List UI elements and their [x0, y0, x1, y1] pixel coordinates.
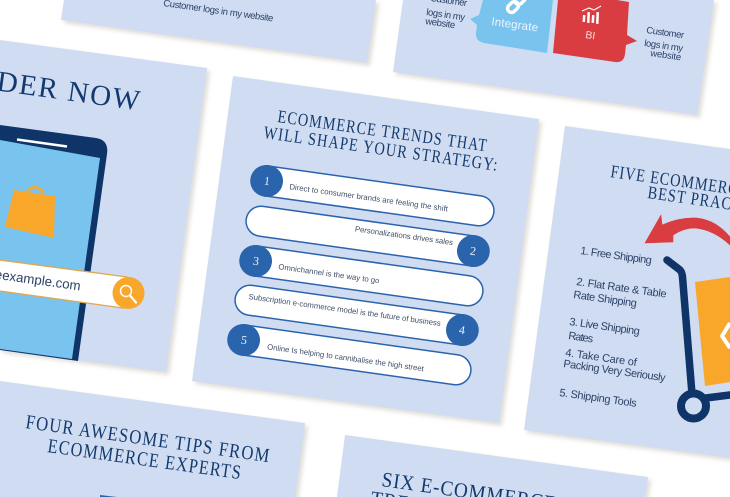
trend 1: Direct to consumer brands are feeling the shift: [289, 182, 449, 214]
text: customer right: Customer: [646, 25, 685, 41]
panel: best practices slide: [524, 126, 730, 458]
trend 3: 3: [252, 254, 260, 268]
shipping list: 4. Take Care of: [565, 347, 638, 369]
text: customer right: [644, 25, 685, 63]
trend 2: 2: [469, 244, 477, 258]
text: customer left: logs in my: [426, 7, 466, 23]
trend 5: [226, 322, 473, 388]
integrate speech block: [470, 0, 553, 53]
trend 2: Personalizations drives sales: [354, 224, 454, 247]
shipping list: 2. Flat Rate & Table: [576, 276, 667, 301]
shipping list: Rate Shipping: [573, 289, 638, 310]
icon: bar chart: [582, 6, 601, 24]
trend 2: [244, 203, 491, 269]
panel: four tips slide: [0, 381, 305, 497]
title: ecommerce trends: ECOMMERCE TRENDS THAT: [276, 106, 489, 155]
panel: six ecommerce slide: [337, 435, 648, 497]
shipping list: 5. Shipping Tools: [559, 387, 638, 410]
text: BI: BI: [585, 29, 596, 42]
trend 3: [238, 243, 485, 309]
text: customer right: logs in my: [644, 38, 684, 54]
panel: ecommerce trends slide: [192, 76, 539, 423]
text: Integrate: Integrate: [491, 16, 539, 35]
title: four awesome tips: ECOMMERCE EXPERTS: [46, 435, 243, 484]
icon: search button: [112, 277, 144, 309]
title: four awesome tips: FOUR AWESOME TIPS FROM: [24, 411, 272, 467]
panel: top right slide: [393, 0, 714, 115]
trend 5: 5: [240, 333, 248, 347]
icon: chain link: [506, 0, 527, 14]
text: customer right: website: [649, 48, 682, 63]
shipping list: [559, 245, 667, 410]
shipping list: Rates: [568, 330, 595, 346]
tip icon top edge: [100, 495, 117, 497]
trend 5: Online Is helping to cannibalise the high street: [267, 342, 425, 373]
trend 1: 1: [263, 174, 271, 188]
shipping list: 1. Free Shipping: [580, 245, 653, 267]
title: ecommerce trends: WILL SHAPE YOUR STRATEGY:: [262, 122, 500, 175]
BI speech block: [553, 0, 637, 62]
search bar: [0, 260, 144, 309]
phone speaker line: [17, 140, 67, 146]
panel: order now slide: [0, 40, 207, 372]
panel: top left slide: [61, 0, 376, 63]
trend 4: Subscription e-commerce model is the future of business: [248, 292, 441, 328]
trend 4: [233, 282, 480, 348]
title: ecommerce trends: [262, 106, 500, 175]
trend 1: [249, 163, 496, 229]
icon: red curved arrow: [645, 215, 730, 245]
text: customer left: website: [424, 16, 456, 31]
text: customer left: [424, 0, 468, 31]
trend 4: 4: [458, 323, 466, 337]
icon: cart with box: [667, 260, 730, 418]
trend 3: Omnichannel is the way to go: [278, 262, 381, 285]
shipping list: Packing Very Seriously: [563, 358, 667, 384]
shipping list: 3. Live Shipping: [569, 316, 641, 338]
phone body: [0, 125, 107, 361]
icon: shopping bag: [5, 187, 55, 238]
phone screen: [0, 140, 100, 359]
